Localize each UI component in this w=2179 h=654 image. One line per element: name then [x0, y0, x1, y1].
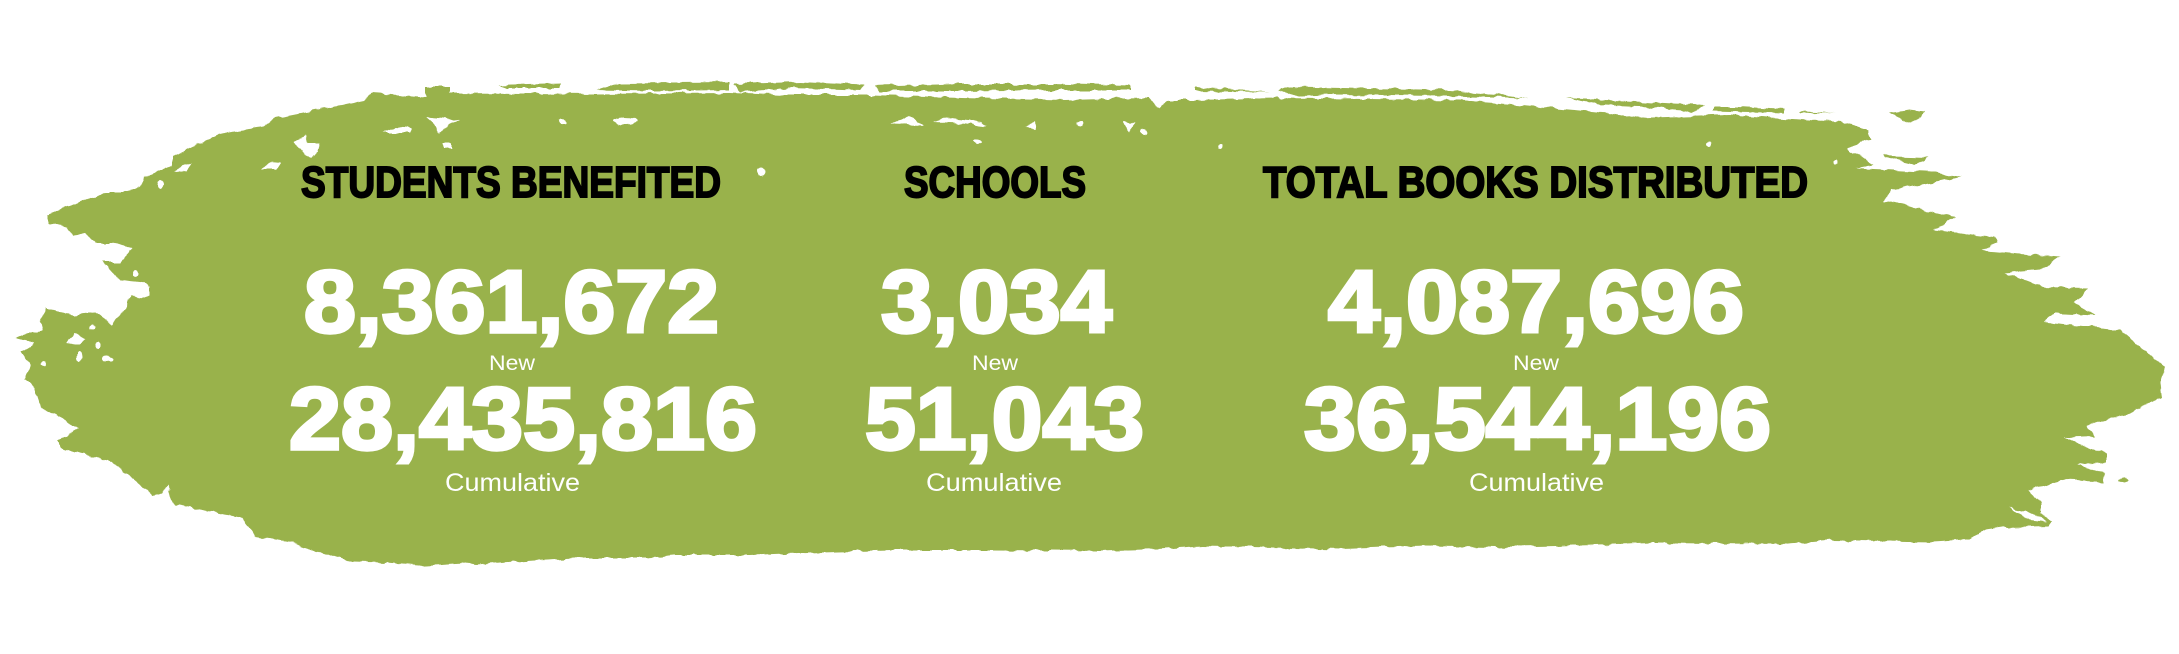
column: total books distributed: [1263, 158, 1808, 497]
label: cumulative students: Cumulative: [445, 469, 580, 497]
label: cumulative books: Cumulative: [1469, 469, 1604, 497]
top streaks: [498, 82, 2128, 482]
number: cumulative students: 28,435,816: [289, 369, 757, 468]
number: cumulative schools: 51,043: [865, 369, 1144, 468]
column: schools: [865, 158, 1144, 497]
heading: total books distributed: TOTAL BOOKS DISTRIBUTED: [1263, 158, 1808, 207]
brush holes: [41, 116, 2048, 522]
label: cumulative schools: Cumulative: [926, 469, 1062, 497]
number: cumulative books: 36,544,196: [1304, 369, 1771, 468]
column: students benefited: [289, 158, 757, 497]
number: new books: 4,087,696: [1328, 252, 1744, 351]
number: new students: 8,361,672: [304, 252, 719, 351]
panel: green brush stroke background: [16, 82, 2165, 566]
label: new schools: New: [972, 352, 1019, 375]
heading: schools: SCHOOLS: [904, 158, 1086, 207]
label: new students: New: [489, 352, 536, 375]
label: new books: New: [1513, 352, 1560, 375]
number: new schools: 3,034: [881, 252, 1112, 351]
heading: students benefited: STUDENTS BENEFITED: [301, 158, 721, 207]
